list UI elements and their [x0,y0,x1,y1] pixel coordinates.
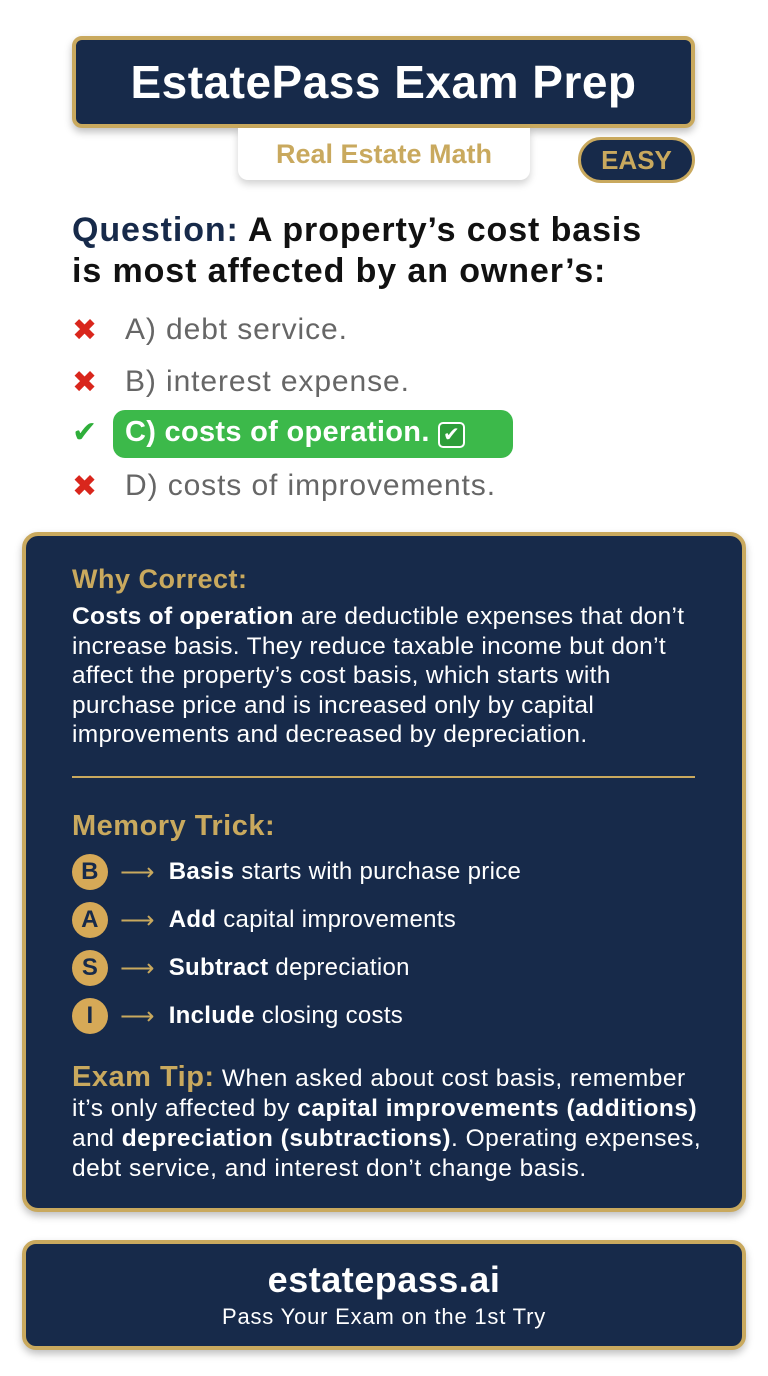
text: explanation body: improvements and decreased by depreciation. [72,721,587,748]
option A [72,313,348,347]
option C correct: ✔ [72,416,98,449]
text: exam tip: debt service, and interest don’t change basis. [72,1155,587,1182]
option B [72,365,410,399]
item B: Basis starts with purchase price [169,858,521,885]
item B: ⟶ [120,858,155,886]
item I: Include closing costs [169,1002,403,1029]
footer tagline: Pass Your Exam on the 1st Try [222,1304,546,1329]
text: explanation body: Costs of operation are deductible expenses that don’t [72,603,684,630]
question [72,211,642,290]
option B: ✖ [72,366,98,399]
text: exam tip [72,1061,701,1182]
difficulty badge: EASY [578,137,695,183]
option C correct [72,410,513,458]
answer options: D) costs of improvements. [125,469,496,502]
subtitle pill: Real Estate Math: Real Estate Math [276,138,492,168]
item S: Subtract depreciation [169,954,410,981]
option D [72,469,496,503]
option A: ✖ [72,314,98,347]
heading: Memory Trick: Memory Trick: [72,810,275,842]
text: exam tip: Exam Tip: When asked about cost basis, remember [72,1061,686,1093]
item A: A [81,906,99,933]
footer site name: estatepass.ai [268,1259,500,1300]
title: EstatePass Exam Prep [130,56,637,108]
heading: Why Correct: Why Correct: [72,564,248,594]
panel: explanation [22,532,746,1212]
text: explanation body: increase basis. They reduce taxable income but don’t [72,632,666,660]
answer options [72,313,513,503]
item B: B [81,858,99,885]
item I [72,998,403,1034]
text: explanation body: purchase price and is increased only by capital [72,692,594,718]
item A: ⟶ [120,906,155,934]
item A [72,902,456,938]
subtitle pill: Real Estate Math [238,128,530,180]
option D: ✖ [72,470,98,503]
difficulty badge: EASY: EASY [601,144,672,174]
header: title banner [72,36,695,128]
mnemonic list [72,854,521,1034]
item S: S [82,954,98,981]
text: explanation body [72,603,684,748]
question: is most affected by an owner’s: [72,252,606,290]
item B [72,854,521,890]
question: Question: A property’s cost basis [72,211,642,249]
item A: Add capital improvements [169,906,456,933]
item S [72,950,410,986]
item S: ⟶ [120,954,155,982]
text: exam tip: and depreciation (subtractions). Operating expenses, [72,1125,701,1152]
answer options: B) interest expense. [125,365,410,398]
item I: I [87,1002,93,1029]
option C correct: C) costs of operation. ✔ [125,416,460,448]
footer banner [22,1240,746,1350]
item I: ⟶ [120,1002,155,1030]
text: explanation body: affect the property’s cost basis, which starts with [72,662,611,689]
text: exam tip: it’s only affected by capital improvements (additions) [72,1095,697,1122]
answer options: A) debt service. [125,313,348,346]
